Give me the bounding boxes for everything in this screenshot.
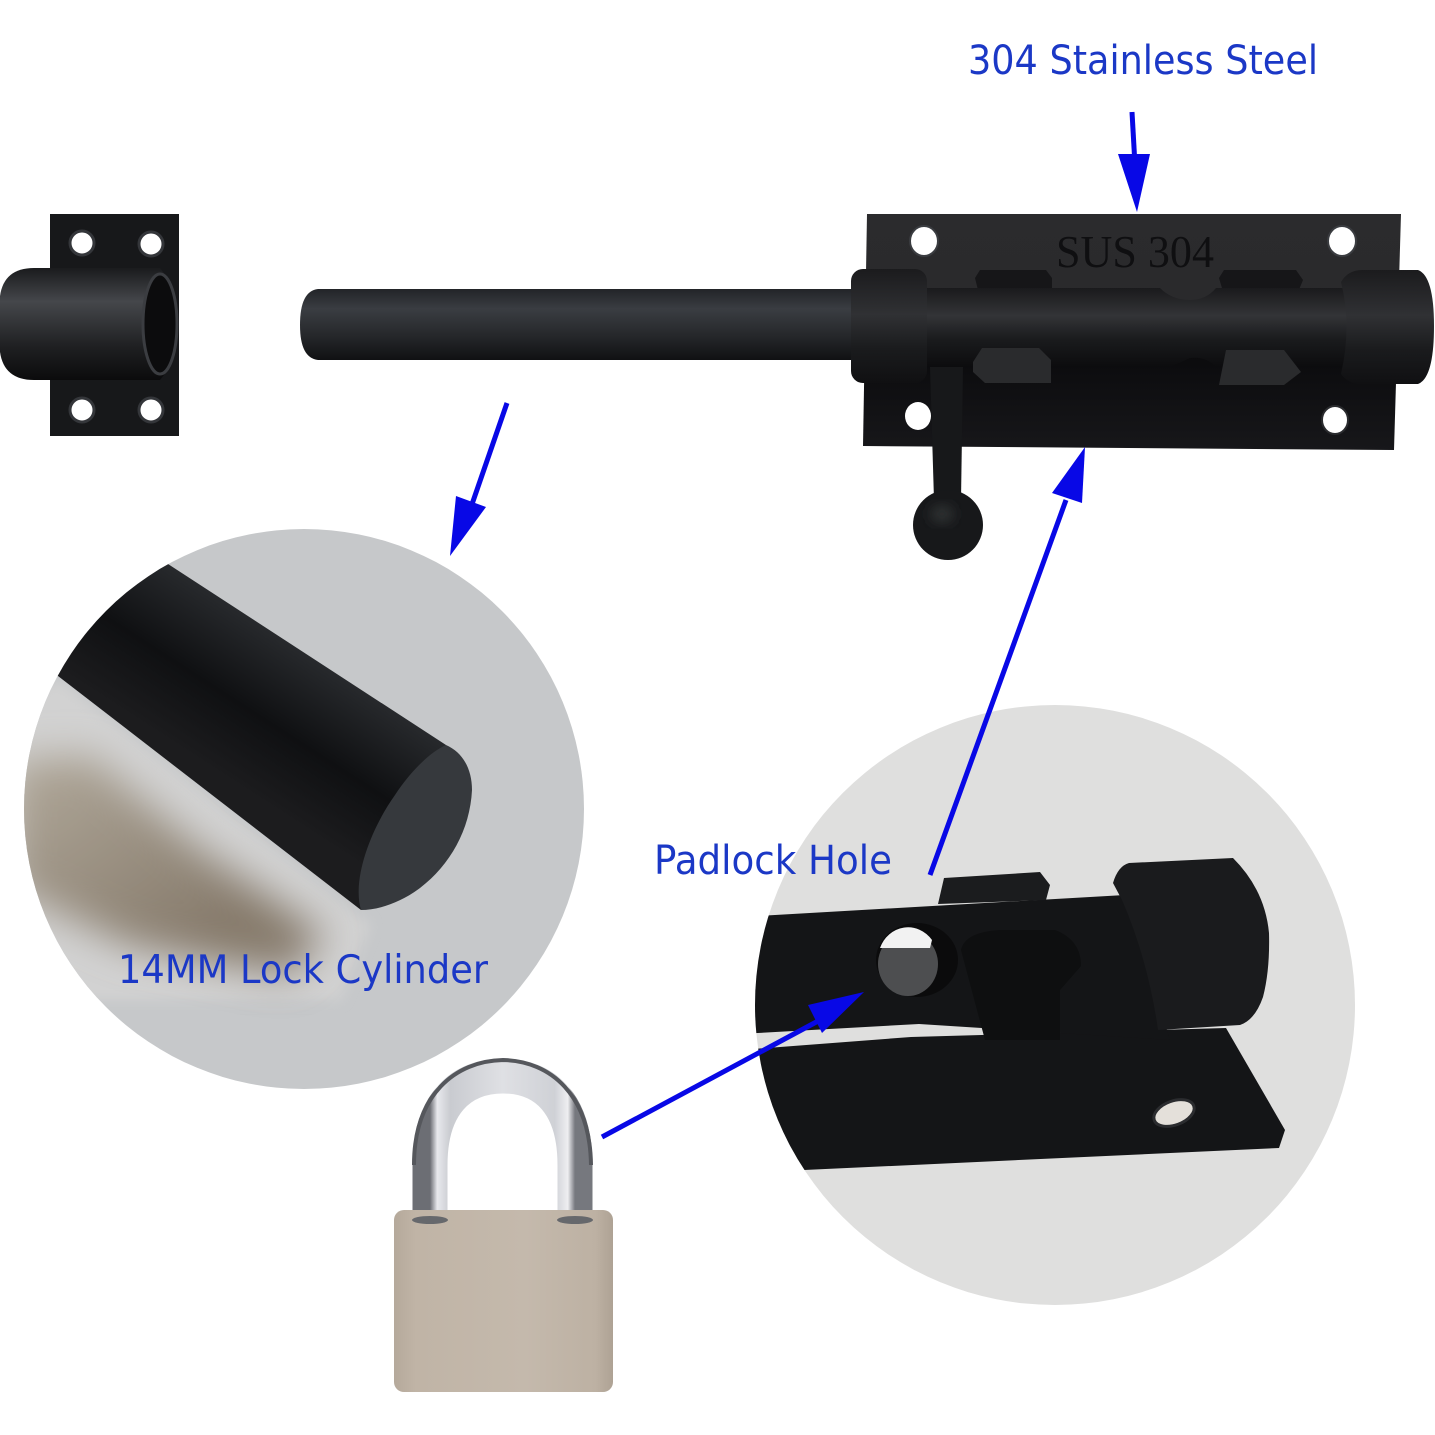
label: padlock hole: Padlock Hole <box>654 838 892 884</box>
left collar <box>851 269 927 383</box>
mounting hole <box>1152 1098 1196 1128</box>
strike plate with cylinder <box>0 214 179 436</box>
barrel bolt body <box>851 214 1434 560</box>
circle: padlock hole detail <box>740 705 1355 1305</box>
upper clips <box>975 270 1052 298</box>
label: material: 304 Stainless Steel <box>968 38 1318 84</box>
tube <box>740 895 1170 1040</box>
handle <box>930 367 963 500</box>
lock rod <box>300 289 860 360</box>
arrow: padlock to hole <box>602 992 864 1137</box>
circle: lock cylinder detail <box>10 529 584 1089</box>
padlock hole <box>876 923 958 997</box>
clip <box>938 872 1050 904</box>
lower clips <box>973 348 1051 383</box>
arrow: to plate top <box>1118 112 1150 212</box>
cylinder label: 14MM Lock Cylinder <box>118 948 489 993</box>
end cap <box>1341 270 1434 384</box>
arrow: padlock hole to bolt <box>930 447 1085 875</box>
tube <box>925 288 1350 367</box>
mounting plate <box>863 214 1401 450</box>
end cap <box>1113 858 1269 1030</box>
engraved text: SUS 304 <box>1056 226 1214 277</box>
arrow: to lock cylinder circle <box>450 403 507 556</box>
plate <box>740 1028 1285 1170</box>
padlock <box>394 1060 613 1392</box>
